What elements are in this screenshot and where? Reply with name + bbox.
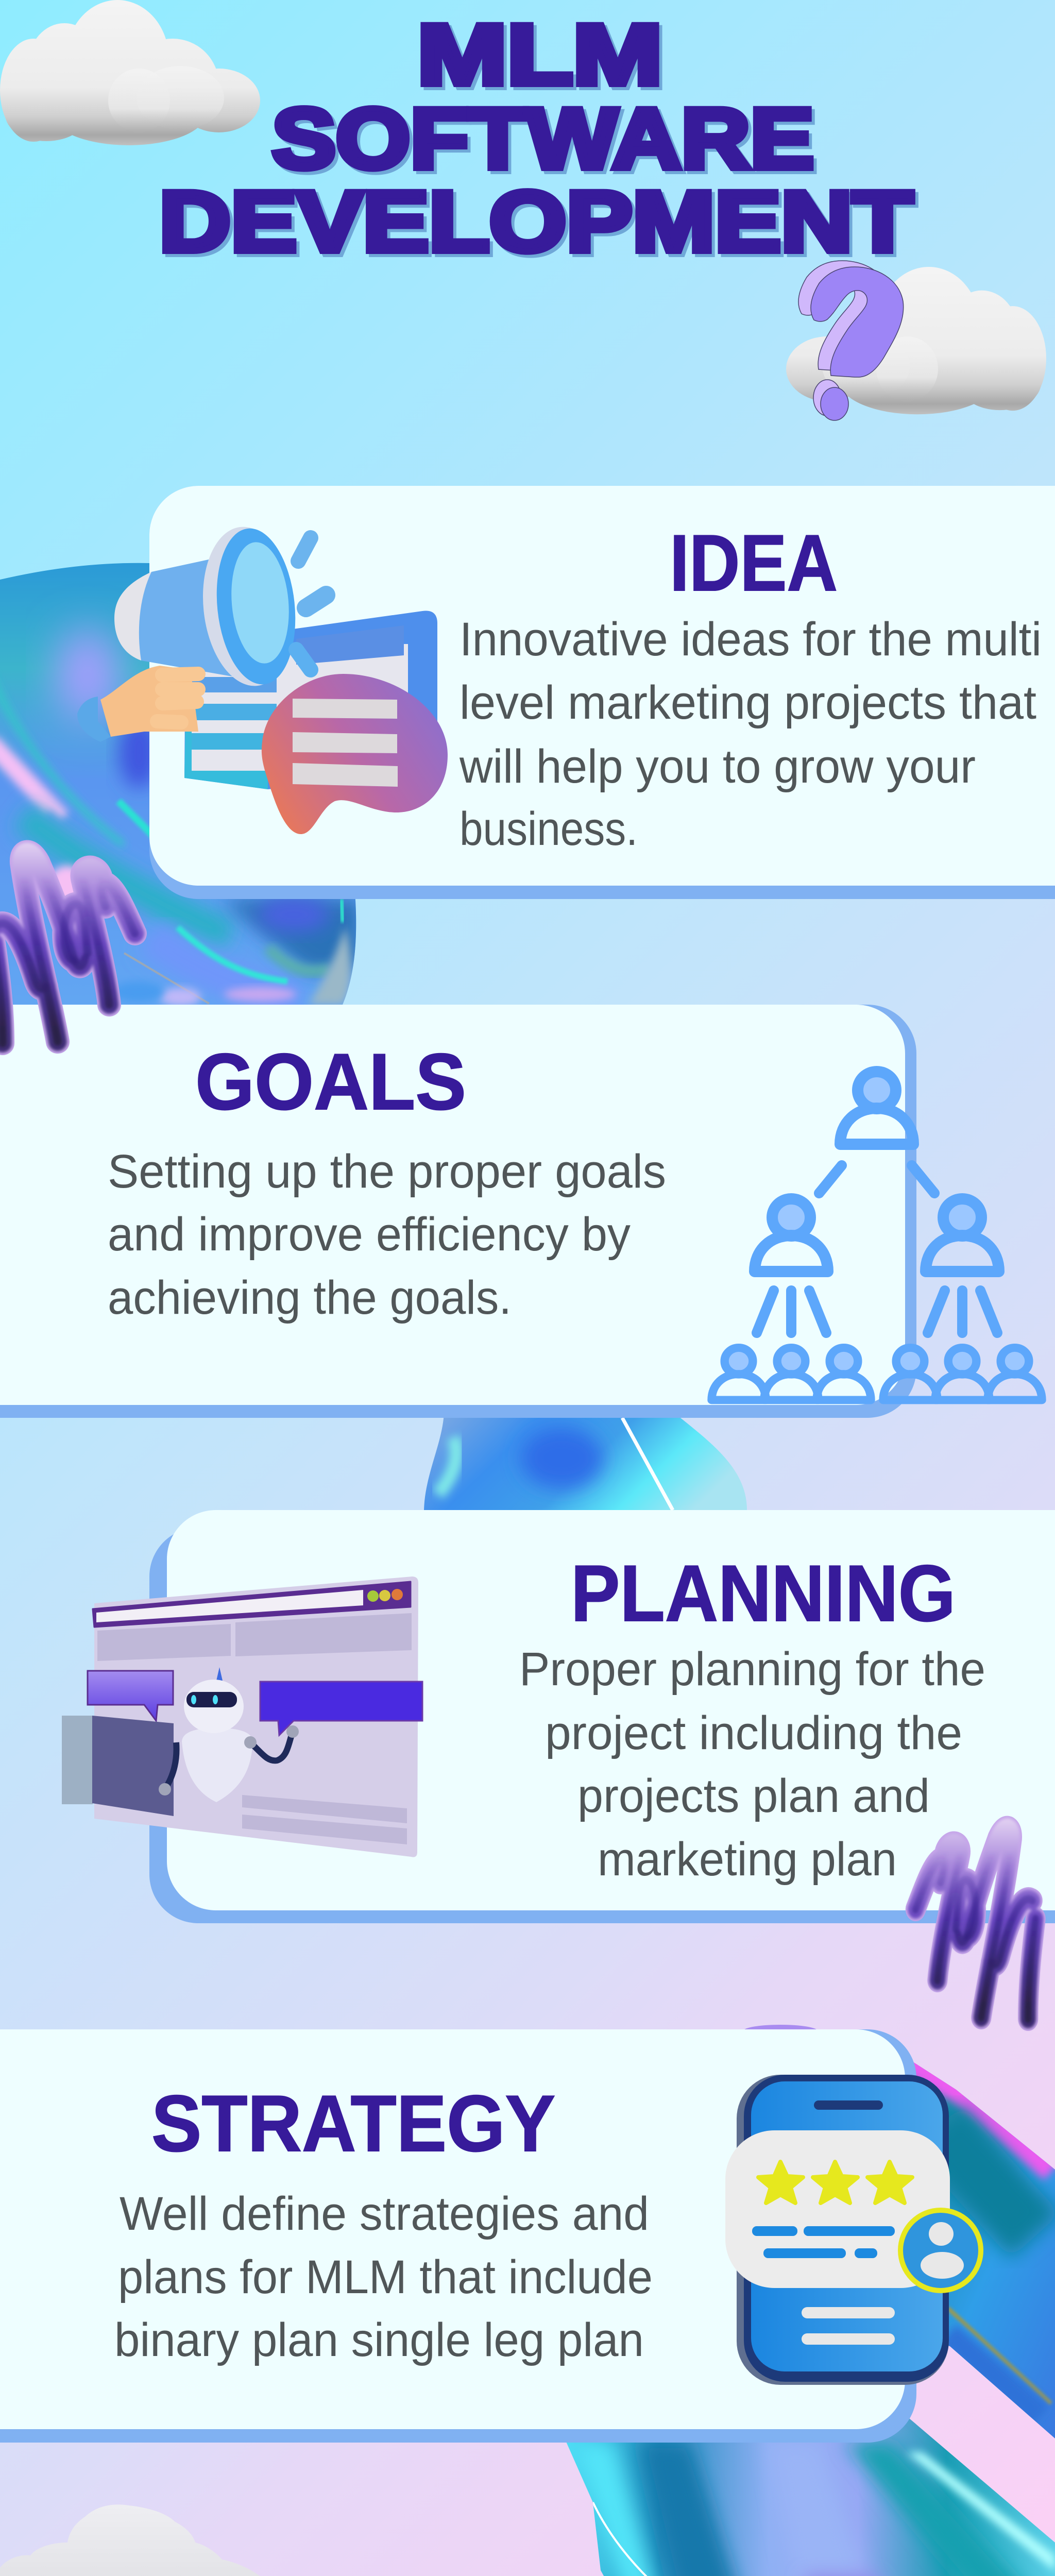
title: MLM <box>420 10 666 106</box>
icon: speech bubble <box>262 674 448 834</box>
icon: network hierarchy <box>711 1072 1042 1400</box>
icon: three stars <box>758 2162 912 2203</box>
heading: planning: PLANNING <box>571 1549 956 1638</box>
decorative iridescent ribbon at bottom right <box>561 2416 1055 2576</box>
heading: idea: IDEA <box>670 518 838 607</box>
review card <box>725 2130 950 2288</box>
icon: user avatar <box>900 2210 981 2291</box>
icon: phone with star rating <box>725 2075 981 2385</box>
text: goals description: and improve efficiency by <box>108 1208 631 1261</box>
icon: robot <box>159 1667 299 1802</box>
decorative iridescent ribbon right of strategy panel <box>914 2062 1055 2438</box>
text: goals description <box>108 1145 666 1324</box>
text: idea description <box>459 613 1042 855</box>
text: planning description: marketing plan <box>598 1833 897 1886</box>
panel: planning <box>149 1510 1055 1923</box>
cloud top right <box>786 267 1046 414</box>
decorative iridescent blob between goals and planning <box>424 1418 747 1510</box>
panel: goals <box>0 1005 916 1418</box>
text: goals description: Setting up the proper goals <box>108 1145 666 1198</box>
title: DEVELOPMENT <box>162 177 916 273</box>
title: MLM <box>417 7 662 103</box>
text: idea description: will help you to grow your <box>459 740 976 793</box>
text: planning description: projects plan and <box>577 1770 930 1822</box>
text: strategy description: binary plan single leg plan <box>114 2314 644 2366</box>
text: idea description: Innovative ideas for the multi <box>460 613 1042 666</box>
heading: goals: GOALS <box>195 1037 466 1126</box>
text: planning description: project including the <box>545 1707 962 1759</box>
icon: question mark <box>798 261 904 420</box>
text: planning description <box>519 1643 985 1886</box>
panel: idea <box>149 486 1055 899</box>
text: strategy description: Well define strategies and <box>120 2188 649 2240</box>
heading: strategy: STRATEGY <box>151 2079 555 2168</box>
text: strategy description: plans for MLM that include <box>118 2251 653 2303</box>
decorative iridescent blob behind idea panel <box>0 556 371 1006</box>
cloud bottom left <box>0 2504 288 2576</box>
panel: strategy <box>0 2029 916 2443</box>
decorative sliver above strategy panel <box>743 2025 818 2037</box>
text: idea description: level marketing projects that <box>460 676 1036 729</box>
decorative purple coil right <box>915 1828 1035 2019</box>
title <box>159 7 916 273</box>
decorative purple coil left <box>0 852 135 1043</box>
title: SOFTWARE <box>272 91 814 187</box>
icon: robot in browser window <box>62 1577 422 1857</box>
text: planning description: Proper planning for the <box>519 1643 985 1696</box>
text: strategy description <box>114 2188 653 2366</box>
text: idea description: business. <box>460 803 638 855</box>
cloud top left <box>0 0 260 145</box>
title: SOFTWARE <box>275 94 817 190</box>
text: goals description: achieving the goals. <box>108 1272 512 1324</box>
title: DEVELOPMENT <box>159 174 913 269</box>
icon: hand holding megaphone <box>77 666 198 742</box>
icon: megaphone with speech bubble <box>77 522 448 834</box>
